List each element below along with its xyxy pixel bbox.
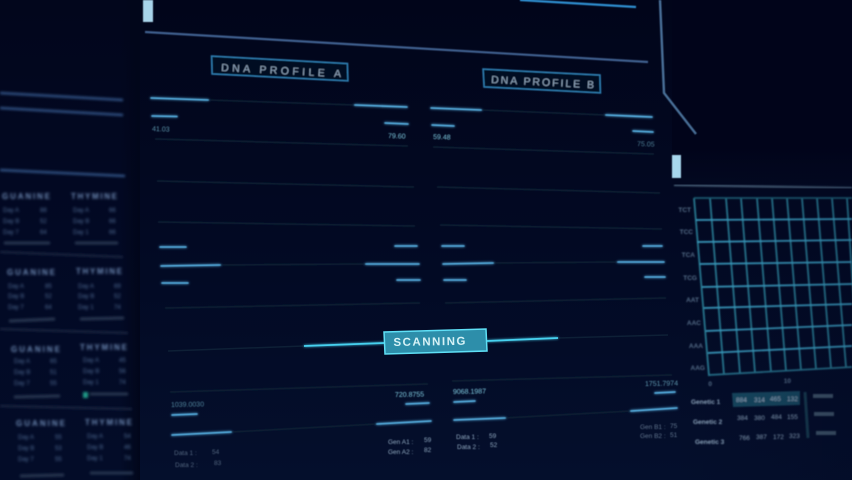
axis labels: AAG xyxy=(691,365,705,372)
genetic table: 484 xyxy=(771,414,782,421)
table block 1: Day B xyxy=(3,219,19,225)
gen labels: 75 xyxy=(670,423,678,430)
genetic table: 172 xyxy=(773,434,784,441)
genetic table xyxy=(691,391,836,446)
table block 3: Day A xyxy=(14,359,30,365)
data labels: 59 xyxy=(489,433,497,440)
row 1 bars xyxy=(151,98,408,124)
table block 2: 52 xyxy=(114,294,121,300)
bottom readouts B xyxy=(452,375,678,451)
genetic table: 323 xyxy=(789,433,800,440)
genetic table: 384 xyxy=(737,415,748,422)
table block 3: 55 xyxy=(50,381,57,387)
data labels xyxy=(456,433,498,451)
row 1 bars xyxy=(431,108,653,132)
table block 4: Day A xyxy=(87,434,103,440)
top frame xyxy=(143,0,696,178)
grid xyxy=(694,198,852,376)
table block 3: THYMINE xyxy=(80,343,128,352)
gen labels xyxy=(640,423,678,440)
value: 75.05 xyxy=(637,141,655,149)
gen labels: Gen B2 : xyxy=(640,433,666,440)
table block 2: Day A xyxy=(8,284,24,290)
genetic table: 766 xyxy=(739,435,750,442)
table block 2: 85 xyxy=(45,284,52,290)
table block 2 xyxy=(7,267,124,321)
value: 79.60 xyxy=(388,133,406,141)
axis labels xyxy=(678,207,791,388)
table block 4: 74 xyxy=(124,456,131,462)
table block 4: 55 xyxy=(55,457,62,463)
axis labels: 10 xyxy=(784,378,791,385)
bars xyxy=(172,403,431,435)
table block 2: Day A xyxy=(78,284,94,290)
table block 2: GUANINE xyxy=(7,268,56,277)
table block 2: Day 1 xyxy=(78,305,94,311)
table block 3: GUANINE xyxy=(11,345,61,354)
data labels: Data 2 : xyxy=(457,444,480,451)
heading: DNA Profile A: DNA PROFILE A xyxy=(221,62,341,80)
axis labels: 0 xyxy=(708,381,712,388)
genetic table: 132 xyxy=(787,396,798,403)
table block 1: Day A xyxy=(73,208,89,214)
axis labels: TCT xyxy=(678,207,691,214)
data labels: Data 2 : xyxy=(175,462,198,469)
axis labels: TCG xyxy=(683,275,697,282)
left side panel: nucleotide tables xyxy=(0,93,133,476)
table block 2: 52 xyxy=(45,294,52,300)
data labels: 52 xyxy=(490,442,498,449)
table block 3: Day B xyxy=(14,370,30,376)
axis labels: AAA xyxy=(689,343,703,350)
table block 2: Day 7 xyxy=(8,305,24,311)
scanning button xyxy=(384,329,487,354)
table block 1: Day A xyxy=(3,208,19,214)
axis labels: TCC xyxy=(680,229,693,236)
heading: DNA Profile B: DNA PROFILE B xyxy=(491,74,594,91)
row 2 bars xyxy=(442,246,665,280)
genetic table: 387 xyxy=(756,434,767,441)
table block 4: 55 xyxy=(55,435,62,441)
table block 4: 54 xyxy=(124,434,131,440)
profile A rows xyxy=(151,98,420,308)
table block 3 xyxy=(11,343,128,398)
data labels: 54 xyxy=(212,449,220,456)
table block 2: Day B xyxy=(78,294,94,300)
vignette xyxy=(670,0,852,480)
table block 3: 51 xyxy=(50,370,57,376)
table block 3: Day A xyxy=(83,358,99,364)
table block 3: 74 xyxy=(119,380,126,386)
gen labels: 59 xyxy=(424,437,432,444)
table block 4: Day 7 xyxy=(18,457,34,463)
table block 3: Day 1 xyxy=(83,380,99,386)
table block 3: 45 xyxy=(119,358,126,364)
value: 9068.1987 xyxy=(453,388,486,396)
data labels xyxy=(174,449,222,469)
genetic table: Genetic 3 xyxy=(695,439,725,446)
table block 3: 65 xyxy=(50,359,57,365)
table block 2: 64 xyxy=(45,305,52,311)
genetic table: 380 xyxy=(754,415,765,422)
table block 2: THYMINE xyxy=(76,267,123,276)
data labels: Data 1 : xyxy=(174,450,197,457)
table block 1: 88 xyxy=(40,208,47,214)
axis labels: AAT xyxy=(686,297,699,304)
gen labels: Gen A2 : xyxy=(388,449,413,456)
data labels: 83 xyxy=(214,460,222,467)
axis labels: TCA xyxy=(682,252,695,259)
bars xyxy=(454,392,677,420)
value: 720.8755 xyxy=(395,391,424,399)
table block 1: 52 xyxy=(40,219,47,225)
table block 4: Day 1 xyxy=(87,456,103,462)
table block 2: 74 xyxy=(114,305,121,311)
table block 1: Day 7 xyxy=(3,230,19,236)
value: 1039.0030 xyxy=(171,401,204,409)
table block 1: 66 xyxy=(109,208,116,214)
table block 1: Day 1 xyxy=(73,230,89,236)
table block 2: 69 xyxy=(114,284,121,290)
genetic table: Genetic 2 xyxy=(693,419,723,426)
genetic table: 155 xyxy=(787,414,798,421)
gen labels: Gen B1 : xyxy=(640,424,666,431)
table block 1: THYMINE xyxy=(71,192,118,201)
genetic table: 465 xyxy=(770,396,781,403)
heading: DNA Profile B xyxy=(483,69,600,93)
table block 4: Day B xyxy=(87,445,103,451)
table block 3: Day 7 xyxy=(14,381,30,387)
table block 4: Day A xyxy=(18,435,34,441)
gen labels: 51 xyxy=(670,432,678,439)
heading: DNA Profile A xyxy=(212,56,348,81)
genetic table: Genetic 1 xyxy=(691,399,721,406)
table block 4: THYMINE xyxy=(85,418,133,427)
table block 4 xyxy=(16,418,133,476)
scanning button: SCANNING xyxy=(393,336,466,349)
value: 1751.7974 xyxy=(645,380,678,388)
table block 3: 56 xyxy=(119,369,126,375)
table block 1: 66 xyxy=(109,219,116,225)
gen labels: Gen A1 : xyxy=(388,439,413,446)
bottom readouts A xyxy=(170,384,432,469)
gen labels: 82 xyxy=(424,447,432,454)
table block 4: 53 xyxy=(55,446,62,452)
data labels: Data 1 : xyxy=(456,434,479,441)
profile B rows xyxy=(431,108,666,303)
table block 1: 66 xyxy=(109,230,116,236)
genetic table: 884 xyxy=(736,397,747,404)
table block 4: 46 xyxy=(124,445,131,451)
right panel: heat grid chart xyxy=(674,185,852,446)
genetic table: 314 xyxy=(754,397,765,404)
table block 3: Day B xyxy=(83,369,99,375)
value: 41.03 xyxy=(152,126,170,134)
table block 1: Day B xyxy=(73,219,89,225)
table block 4: GUANINE xyxy=(16,419,66,428)
value: 59.48 xyxy=(433,134,451,142)
gen labels xyxy=(388,437,432,456)
axis labels: AAC xyxy=(687,320,701,327)
table block 1: 64 xyxy=(40,230,47,236)
row 2 bars xyxy=(160,246,420,283)
table block 4: Day B xyxy=(18,446,34,452)
table block 1 xyxy=(2,192,118,243)
table block 2: Day B xyxy=(8,294,24,300)
table block 1: GUANINE xyxy=(2,192,51,201)
scanning indicator xyxy=(168,329,668,354)
